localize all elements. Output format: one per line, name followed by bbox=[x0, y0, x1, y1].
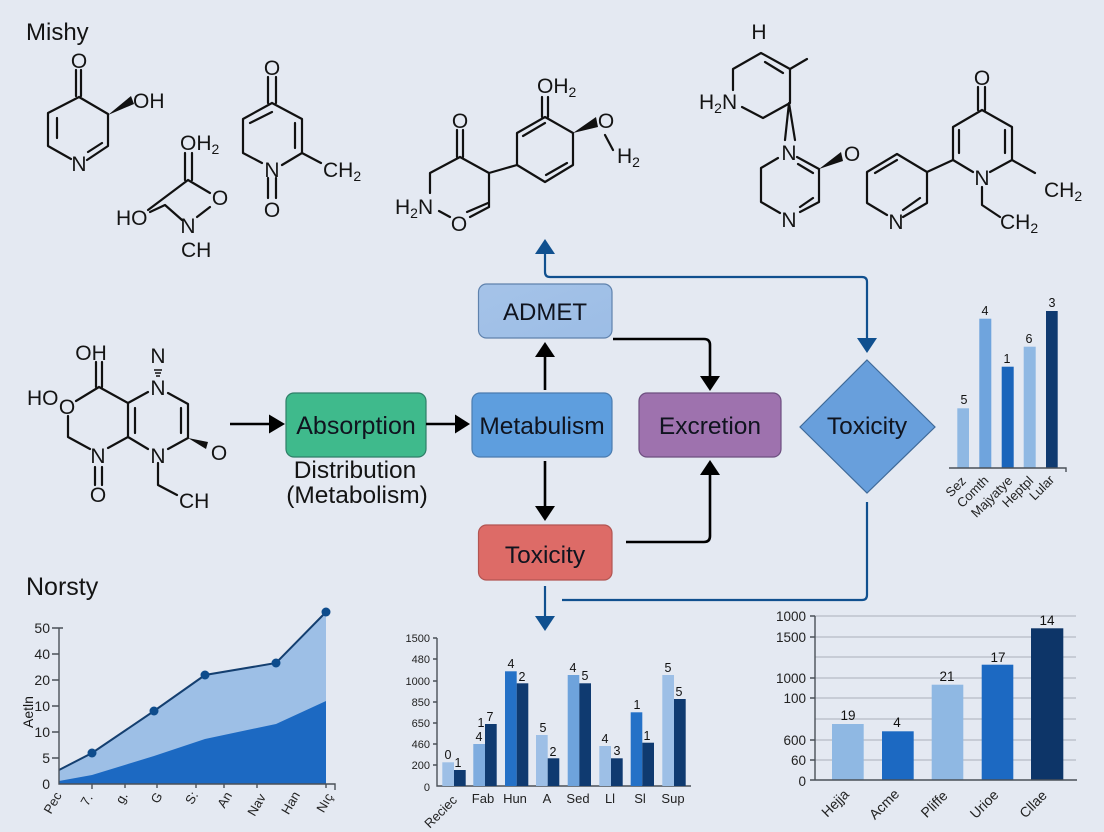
molecule 2: CH bbox=[181, 239, 211, 262]
grouped bar chart: 480 bbox=[412, 654, 430, 666]
heading: Mishy: Mishy bbox=[26, 19, 89, 46]
molecule 7: O bbox=[90, 484, 106, 507]
molecule 7: CH bbox=[179, 490, 209, 513]
molecule 1: OH bbox=[133, 90, 164, 113]
molecule 5: O bbox=[844, 143, 860, 166]
molecule 4: OH bbox=[537, 75, 568, 98]
molecule 6: 2 bbox=[1030, 220, 1038, 236]
area chart: An bbox=[214, 789, 235, 810]
grouped bar chart: 4 bbox=[476, 730, 483, 744]
bar chart with gridlines: 21 bbox=[939, 669, 955, 684]
area chart: 10 bbox=[34, 724, 50, 740]
molecule 6: 2 bbox=[1074, 188, 1082, 204]
molecule 4: H bbox=[617, 145, 632, 168]
grouped bar chart: 2 bbox=[519, 670, 526, 684]
bar chart with gridlines: 100 bbox=[783, 691, 806, 706]
grouped bar chart: Sl bbox=[634, 791, 646, 806]
molecule 1: O bbox=[71, 50, 87, 73]
arrow: ADMET to excretion bbox=[613, 339, 720, 391]
bar chart with gridlines: Urioe bbox=[967, 786, 1002, 821]
grouped bar chart: 5 bbox=[582, 669, 589, 683]
grouped bar chart: 1 bbox=[478, 716, 485, 730]
molecule 1 bbox=[48, 50, 164, 176]
grouped bar chart: 650 bbox=[412, 718, 430, 730]
bar chart with gridlines: 14 bbox=[1039, 613, 1055, 628]
bar chart with gridlines: Acme bbox=[866, 786, 902, 822]
label: Distribution (Metabolism) bbox=[286, 457, 428, 509]
grouped bar chart: 1500 bbox=[406, 633, 430, 645]
molecule 2: O bbox=[212, 187, 228, 210]
grouped bar chart: Sup bbox=[661, 791, 685, 806]
area chart: 50 bbox=[34, 620, 50, 636]
node: ADMET: ADMET bbox=[503, 299, 587, 326]
grouped bar chart: 1 bbox=[634, 698, 641, 712]
molecule 7: O bbox=[211, 442, 227, 465]
small bar chart right: 6 bbox=[1026, 332, 1033, 346]
grouped bar chart: 0 bbox=[445, 748, 452, 762]
molecule 7: OH bbox=[75, 342, 107, 365]
node: ADMET bbox=[478, 284, 612, 338]
grouped bar chart: 5 bbox=[665, 661, 672, 675]
grouped bar chart bbox=[406, 633, 691, 831]
molecule 6 bbox=[867, 67, 1082, 236]
grouped bar chart: 5 bbox=[676, 685, 683, 699]
molecule 6: CH bbox=[1000, 211, 1030, 234]
small bar chart right: Comth bbox=[954, 473, 991, 510]
grouped bar chart: 850 bbox=[412, 697, 430, 709]
small bar chart right: 3 bbox=[1049, 296, 1056, 310]
area chart: 5 bbox=[42, 750, 50, 766]
molecule 2: N bbox=[180, 215, 196, 238]
area chart: S: bbox=[182, 789, 201, 807]
molecule 5 bbox=[699, 21, 860, 232]
small bar chart right bbox=[942, 296, 1066, 520]
molecule 7: HO bbox=[27, 387, 58, 410]
molecule 5: H bbox=[699, 91, 714, 114]
grouped bar chart: Reciec bbox=[421, 792, 460, 831]
arrow: molecule to absorption bbox=[230, 414, 285, 434]
molecule 3: O bbox=[264, 199, 280, 222]
bar chart with gridlines: Pliffe bbox=[917, 787, 951, 821]
molecule 7: N bbox=[150, 377, 166, 400]
molecule 4: O bbox=[451, 213, 467, 236]
bar chart with gridlines: 1000 bbox=[776, 609, 806, 624]
area chart: Nav bbox=[244, 791, 269, 819]
molecule 6: N bbox=[888, 211, 904, 234]
grouped bar chart: 1 bbox=[455, 756, 462, 770]
molecule 5: H bbox=[751, 21, 767, 44]
molecule 2: 2 bbox=[212, 141, 220, 157]
bar chart with gridlines: 17 bbox=[990, 650, 1006, 665]
bar chart with gridlines: 60 bbox=[791, 753, 806, 768]
label: Distribution (Metabolism): (Metabolism) bbox=[286, 482, 428, 509]
area chart: 40 bbox=[34, 646, 50, 662]
grouped bar chart: Hun bbox=[503, 791, 527, 806]
arrow: absorption to metabolism bbox=[426, 414, 470, 434]
bar chart with gridlines: 0 bbox=[798, 774, 806, 789]
small bar chart right: 1 bbox=[1004, 352, 1011, 366]
area chart: G bbox=[148, 790, 166, 806]
grouped bar chart: 4 bbox=[602, 732, 609, 746]
bar chart with gridlines: 600 bbox=[783, 733, 806, 748]
arrow: metabolism to ADMET bbox=[535, 342, 555, 390]
grouped bar chart: 0 bbox=[424, 782, 430, 794]
area chart: Nıç bbox=[313, 790, 336, 815]
grouped bar chart: 1000 bbox=[406, 676, 430, 688]
grouped bar chart: A bbox=[543, 791, 552, 806]
molecule 6: CH bbox=[1044, 179, 1074, 202]
bar chart with gridlines bbox=[776, 609, 1077, 822]
molecule 4 bbox=[395, 75, 640, 236]
small bar chart right: 5 bbox=[961, 393, 968, 407]
molecule 4: 2 bbox=[632, 154, 640, 170]
area chart: 10 bbox=[34, 698, 50, 714]
molecule 4: 2 bbox=[568, 84, 576, 100]
bar chart with gridlines: 19 bbox=[840, 708, 856, 723]
node: Toxicity diamond: Toxicity bbox=[827, 413, 908, 440]
molecule 3: CH bbox=[323, 159, 353, 182]
molecule 4: O bbox=[452, 110, 468, 133]
node: Excretion bbox=[639, 393, 781, 457]
bar chart with gridlines: Cllae bbox=[1016, 787, 1050, 821]
grouped bar chart: 4 bbox=[508, 657, 515, 671]
bar chart with gridlines: 1500 bbox=[776, 630, 806, 645]
molecule 7: O bbox=[59, 396, 75, 419]
molecule 7 bbox=[27, 342, 227, 513]
molecule 4: N bbox=[418, 196, 433, 219]
area chart: 20 bbox=[34, 672, 50, 688]
grouped bar chart: 1 bbox=[644, 729, 651, 743]
molecule 3: N bbox=[264, 159, 280, 182]
bar chart with gridlines: 4 bbox=[893, 715, 901, 730]
grouped bar chart: Ll bbox=[605, 791, 615, 806]
grouped bar chart: 7 bbox=[487, 710, 494, 724]
molecule 7: N bbox=[150, 345, 166, 368]
area chart: g. bbox=[112, 789, 131, 806]
molecule 2: HO bbox=[116, 207, 148, 230]
small bar chart right: 4 bbox=[982, 304, 989, 318]
molecule 1: N bbox=[71, 153, 87, 176]
molecule 5: N bbox=[781, 209, 797, 232]
node: Metabulism bbox=[472, 393, 612, 457]
area chart: Aetln bbox=[20, 696, 36, 728]
molecule 3: 2 bbox=[353, 168, 361, 184]
molecule 3: O bbox=[264, 57, 280, 80]
area chart: 7. bbox=[77, 791, 96, 808]
node: Toxicity diamond bbox=[800, 360, 935, 493]
label: Distribution (Metabolism): Distribution bbox=[294, 457, 416, 484]
molecule 7: N bbox=[90, 445, 106, 468]
arrow: metabolism to toxicity bbox=[535, 461, 555, 521]
bar chart with gridlines: 1000 bbox=[776, 671, 806, 686]
heading: Norsty: Norsty bbox=[26, 573, 99, 601]
small bar chart right: Majyatye bbox=[968, 473, 1015, 520]
molecule 6: N bbox=[974, 167, 990, 190]
small bar chart right: Heptpl bbox=[999, 473, 1036, 510]
molecule 4: 2 bbox=[410, 205, 418, 221]
molecule 5: 2 bbox=[714, 100, 722, 116]
molecule 2 bbox=[116, 132, 228, 262]
node: Excretion: Excretion bbox=[659, 413, 761, 440]
molecule 7: N bbox=[150, 445, 166, 468]
area chart: Pec bbox=[40, 789, 65, 816]
area chart: Han bbox=[278, 789, 303, 817]
node: Absorption bbox=[286, 393, 426, 457]
grouped bar chart: 2 bbox=[550, 745, 557, 759]
molecule 3 bbox=[243, 57, 361, 222]
area chart: 0 bbox=[42, 776, 50, 792]
molecule 5: N bbox=[722, 91, 737, 114]
molecule 6: O bbox=[974, 67, 990, 90]
area chart bbox=[20, 608, 336, 819]
small bar chart right: Lular bbox=[1026, 472, 1058, 503]
molecule 4: O bbox=[598, 110, 614, 133]
grouped bar chart: Fab bbox=[472, 791, 494, 806]
arrow: bottom link bbox=[562, 502, 867, 600]
node: Absorption: Absorption bbox=[296, 412, 416, 440]
node: Toxicity red: Toxicity bbox=[505, 542, 586, 569]
grouped bar chart: 3 bbox=[614, 744, 621, 758]
grouped bar chart: 5 bbox=[540, 721, 547, 735]
grouped bar chart: 460 bbox=[412, 739, 430, 751]
molecule 5: N bbox=[781, 142, 797, 165]
bar chart with gridlines: Hejja bbox=[818, 786, 852, 820]
small bar chart right: Sez bbox=[942, 473, 969, 500]
arrow: feedback top loop bbox=[535, 239, 877, 353]
arrow: down to chart bbox=[535, 586, 555, 631]
grouped bar chart: 4 bbox=[570, 661, 577, 675]
molecule 4: H bbox=[395, 196, 410, 219]
grouped bar chart: 200 bbox=[412, 760, 430, 772]
grouped bar chart: Sed bbox=[566, 791, 590, 806]
molecule 2: OH bbox=[180, 132, 212, 155]
arrow: toxicity to excretion bbox=[626, 460, 720, 542]
node: Toxicity red bbox=[478, 525, 612, 580]
node: Metabulism: Metabulism bbox=[479, 413, 605, 440]
